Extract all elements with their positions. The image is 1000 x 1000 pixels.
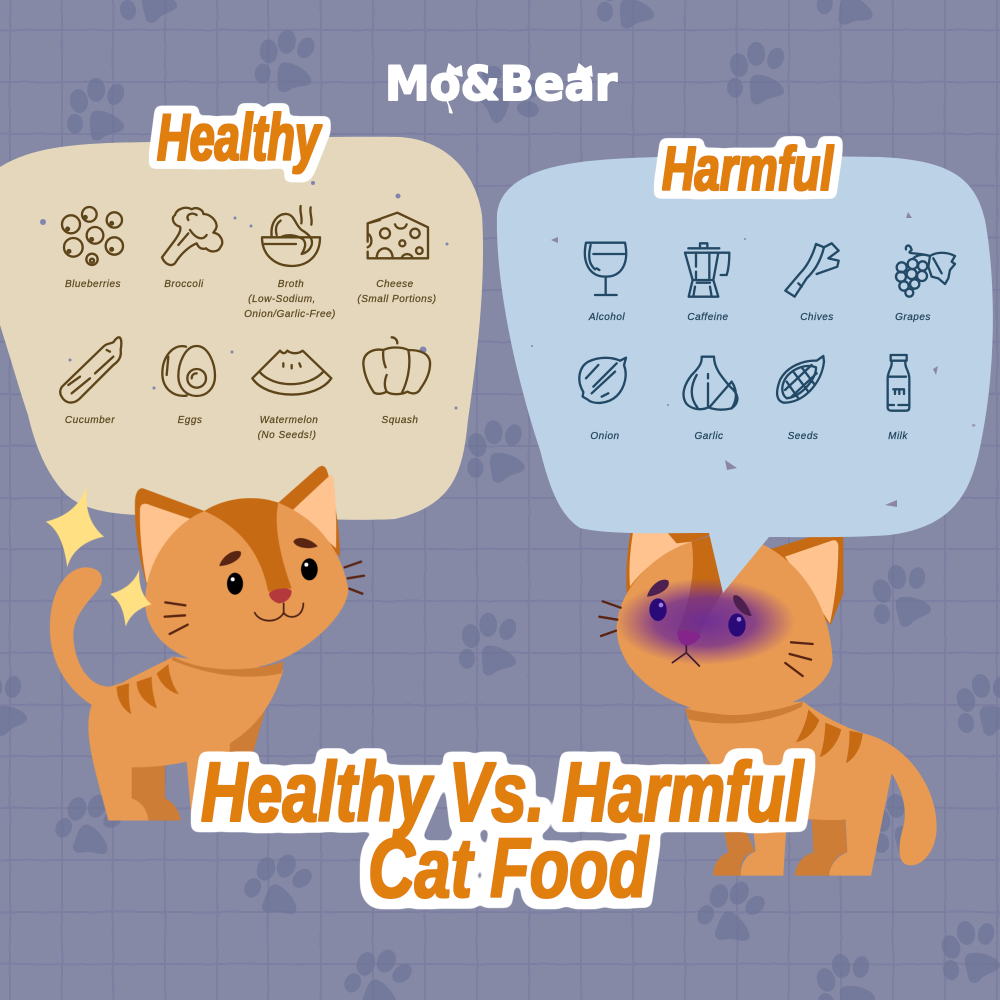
icon: chives xyxy=(785,243,839,297)
whiskers xyxy=(599,601,813,676)
head xyxy=(617,537,833,715)
icon: onion xyxy=(579,358,626,403)
whiskers xyxy=(165,562,364,634)
icon: grapes xyxy=(896,246,955,297)
healthy labels: (No Seeds!) xyxy=(258,430,316,441)
healthy labels: Watermelon xyxy=(260,415,318,426)
bruise xyxy=(615,578,795,665)
specks xyxy=(531,212,976,507)
healthy labels: Eggs xyxy=(178,415,202,426)
back leg xyxy=(130,710,265,821)
brows xyxy=(647,580,752,616)
harmful labels: Caffeine xyxy=(687,312,729,323)
heading: Harmful: Harmful xyxy=(662,135,834,204)
harmful icons xyxy=(579,243,955,411)
harmful labels: Milk xyxy=(888,431,908,442)
healthy labels: Cucumber xyxy=(65,415,115,426)
harmful labels: Grapes xyxy=(895,312,931,323)
cat: harmful xyxy=(599,527,937,876)
icon: cucumber xyxy=(60,337,121,403)
ears xyxy=(626,527,843,625)
icon: broth xyxy=(262,206,320,266)
icon: garlic xyxy=(684,357,737,410)
specks xyxy=(40,181,458,410)
panel: healthy xyxy=(0,100,483,520)
body xyxy=(88,657,283,821)
healthy labels xyxy=(65,279,437,441)
healthy labels: Blueberries xyxy=(65,279,121,290)
icon: seeds xyxy=(777,356,824,403)
nose xyxy=(677,631,701,646)
collar xyxy=(685,702,803,723)
title: Healthy Vs. Harmful xyxy=(201,745,804,839)
tail xyxy=(863,733,937,865)
stripes xyxy=(796,709,863,763)
icon: broccoli xyxy=(162,208,222,265)
icon: alcohol xyxy=(585,243,626,295)
tail xyxy=(50,567,130,727)
collar xyxy=(172,657,283,677)
icon: blueberries xyxy=(62,207,123,265)
harmful labels: Garlic xyxy=(694,431,724,442)
healthy icons xyxy=(60,206,430,403)
nose xyxy=(269,588,292,603)
healthy labels: (Low-Sodium, xyxy=(248,294,316,305)
ears xyxy=(135,466,340,585)
icon: eggs xyxy=(162,346,215,396)
sparkles xyxy=(46,487,152,627)
harmful labels: Onion xyxy=(590,431,620,442)
stripe xyxy=(204,498,292,592)
title xyxy=(201,745,804,915)
healthy labels: Onion/Garlic-Free) xyxy=(244,309,336,320)
cat: healthy xyxy=(46,466,364,821)
logo: Mo&Bear xyxy=(385,57,618,112)
healthy labels: Squash xyxy=(382,415,418,426)
icon: caffeine xyxy=(685,243,729,297)
healthy labels: Broth xyxy=(278,279,304,290)
mouth xyxy=(672,646,699,666)
title: Cat Food xyxy=(368,821,649,915)
healthy labels: Broccoli xyxy=(164,279,204,290)
harmful labels: Chives xyxy=(800,312,834,323)
healthy labels: Cheese xyxy=(376,279,414,290)
harmful labels xyxy=(588,312,931,442)
back legs xyxy=(705,760,847,876)
eyes xyxy=(227,573,243,595)
body xyxy=(685,702,892,876)
stripes xyxy=(117,664,179,714)
icon: cheese xyxy=(368,213,428,258)
panel: harmful xyxy=(497,135,993,593)
icon: squash xyxy=(363,337,430,394)
head xyxy=(145,498,348,668)
eyes xyxy=(649,598,667,621)
brows xyxy=(219,538,318,566)
harmful labels: Seeds xyxy=(788,431,818,442)
icon: watermelon xyxy=(252,351,331,395)
stripe xyxy=(677,536,723,634)
heading: Healthy: Healthy xyxy=(157,100,322,174)
healthy labels: (Small Portions) xyxy=(357,294,437,305)
face lines xyxy=(255,603,303,621)
icon: milk xyxy=(888,355,909,411)
harmful labels: Alcohol xyxy=(588,312,625,323)
